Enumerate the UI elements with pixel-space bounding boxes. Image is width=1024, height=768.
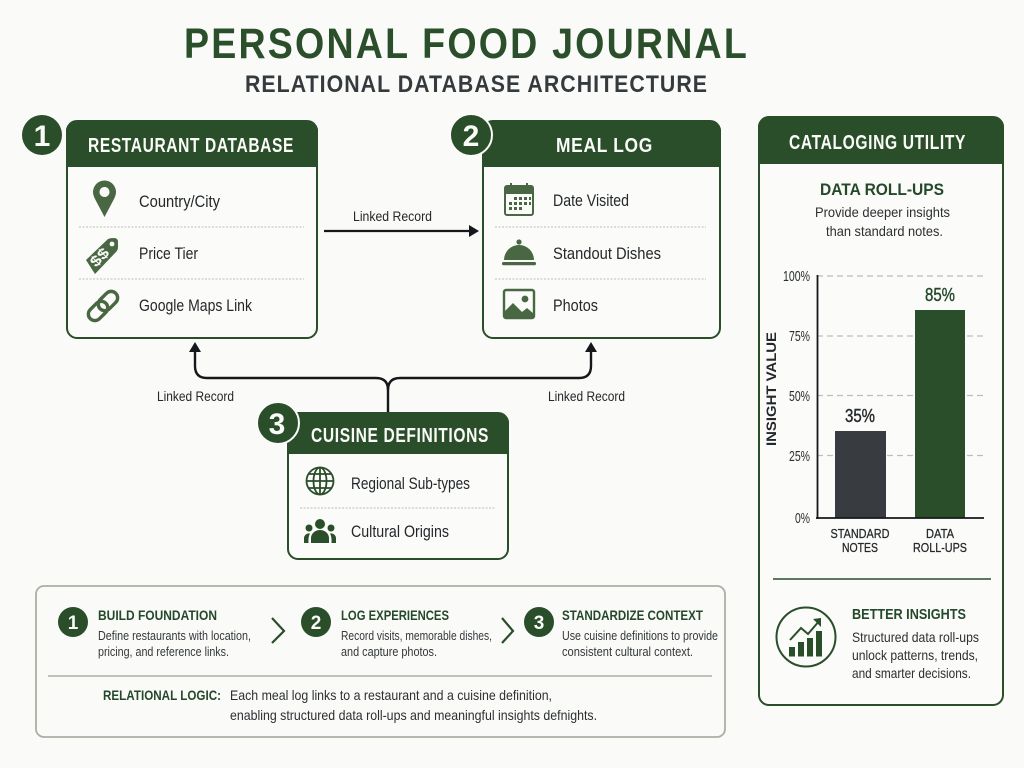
relational logic note: enabling structured data roll-ups and meaningful insights defnights. bbox=[230, 707, 597, 723]
panel: process steps and relational logic bbox=[36, 586, 725, 737]
step 3: standardize context: 3 bbox=[534, 613, 544, 634]
label: linked record left: Linked Record bbox=[157, 388, 234, 404]
row: photos: Photos bbox=[553, 297, 598, 315]
arrow: chevron step 2 to 3 bbox=[502, 618, 513, 643]
arrow: chevron step 1 to 2 bbox=[272, 618, 284, 643]
description: data roll-ups: Provide deeper insights bbox=[815, 204, 950, 220]
relational logic note: Each meal log links to a restaurant and a cuisine definition, bbox=[230, 687, 552, 703]
arrow: restaurant database to meal log bbox=[324, 225, 479, 237]
bar chart: insight value: 50% bbox=[789, 388, 810, 405]
callout: better insights: BETTER INSIGHTS bbox=[852, 606, 966, 623]
heading: cataloging utility: CATALOGING UTILITY bbox=[789, 132, 966, 154]
bar chart: insight value bbox=[763, 268, 984, 555]
panel: restaurant database bbox=[66, 121, 318, 338]
description: data roll-ups bbox=[815, 204, 950, 239]
row: standout dishes: Standout Dishes bbox=[553, 245, 661, 263]
subtitle: RELATIONAL DATABASE ARCHITECTURE bbox=[245, 71, 708, 98]
step 2: log experiences: 2 bbox=[311, 613, 321, 634]
row: google maps link: Google Maps Link bbox=[139, 297, 253, 315]
badge: number 3 bbox=[257, 402, 299, 444]
callout: better insights: Structured data roll-ups bbox=[852, 629, 979, 645]
panel: cataloging utility bbox=[758, 117, 1004, 705]
step 2: log experiences: and capture photos. bbox=[341, 645, 437, 659]
step 1: build foundation: 1 bbox=[68, 613, 79, 634]
bar chart: insight value: 85% bbox=[925, 285, 955, 305]
badge: number 1 bbox=[22, 115, 62, 155]
badge: number 2: 2 bbox=[463, 120, 479, 153]
step 3: standardize context: consistent cultural context. bbox=[562, 645, 693, 659]
row: price tier: Price Tier bbox=[139, 245, 198, 263]
title: PERSONAL FOOD JOURNAL bbox=[184, 20, 749, 68]
step 3: standardize context bbox=[524, 607, 718, 659]
bar: standard notes 35% bbox=[835, 431, 886, 518]
badge: number 2 bbox=[450, 114, 492, 156]
icon: chain link bbox=[86, 289, 120, 323]
bar chart: insight value: 75% bbox=[789, 328, 810, 345]
row: date visited: Date Visited bbox=[553, 192, 629, 210]
row: regional sub-types: Regional Sub-types bbox=[351, 475, 470, 493]
subheading: data roll-ups: DATA ROLL-UPS bbox=[820, 180, 944, 199]
bar: data roll-ups 85% bbox=[915, 310, 965, 518]
label: linked record top: Linked Record bbox=[353, 208, 432, 224]
icon: price tag: $$ bbox=[87, 244, 114, 271]
bar chart: insight value: INSIGHT VALUE bbox=[763, 332, 779, 446]
bar chart: insight value: ROLL-UPS bbox=[913, 541, 967, 555]
row: country/city: Country/City bbox=[139, 193, 221, 211]
icon: serving cloche bbox=[502, 239, 536, 265]
relational logic note bbox=[103, 687, 597, 723]
icon: rising chart in circle bbox=[776, 608, 836, 666]
step 3: standardize context: STANDARDIZE CONTEXT bbox=[562, 607, 703, 623]
bar chart: insight value: 0% bbox=[795, 510, 810, 527]
step 2: log experiences: Record visits, memorable dishes, bbox=[341, 629, 492, 643]
step 1: build foundation: pricing, and reference links. bbox=[98, 645, 229, 659]
description: data roll-ups: than standard notes. bbox=[826, 223, 943, 239]
panel: cuisine definitions bbox=[287, 413, 509, 559]
icon: price tag bbox=[86, 238, 118, 274]
step 1: build foundation: Define restaurants with location, bbox=[98, 629, 251, 643]
bar chart: insight value: 100% bbox=[783, 268, 810, 285]
callout: better insights bbox=[852, 606, 979, 681]
heading: meal log: MEAL LOG bbox=[556, 135, 653, 157]
badge: number 1: 1 bbox=[34, 120, 50, 153]
bar chart: insight value: STANDARD bbox=[830, 527, 890, 541]
relational logic note: RELATIONAL LOGIC: bbox=[103, 687, 221, 703]
step 2: log experiences bbox=[301, 607, 492, 659]
icon: map pin bbox=[93, 180, 116, 217]
step 1: build foundation: BUILD FOUNDATION bbox=[98, 607, 217, 623]
icon: people bbox=[304, 519, 336, 543]
bar chart: insight value: NOTES bbox=[842, 541, 878, 555]
icon: calendar bbox=[505, 183, 533, 215]
icon: photo bbox=[504, 290, 534, 318]
connector arrows: cuisine definitions to both tables bbox=[189, 342, 597, 413]
heading: restaurant database: RESTAURANT DATABASE bbox=[88, 135, 294, 157]
badge: number 3: 3 bbox=[269, 408, 285, 441]
label: linked record right: Linked Record bbox=[548, 388, 625, 404]
bar chart: insight value: 25% bbox=[789, 448, 810, 465]
callout: better insights: unlock patterns, trends, bbox=[852, 647, 978, 663]
heading: cuisine definitions: CUISINE DEFINITIONS bbox=[311, 425, 489, 447]
icon: globe bbox=[306, 468, 334, 494]
bar chart: insight value: 35% bbox=[845, 406, 875, 426]
step 3: standardize context: Use cuisine definitions to provide bbox=[562, 629, 718, 643]
callout: better insights: and smarter decisions. bbox=[852, 665, 971, 681]
step 2: log experiences: LOG EXPERIENCES bbox=[341, 607, 449, 623]
bar chart: insight value: DATA bbox=[926, 527, 955, 541]
panel: meal log bbox=[482, 121, 721, 338]
row: cultural origins: Cultural Origins bbox=[351, 523, 449, 541]
step 1: build foundation bbox=[58, 607, 251, 659]
